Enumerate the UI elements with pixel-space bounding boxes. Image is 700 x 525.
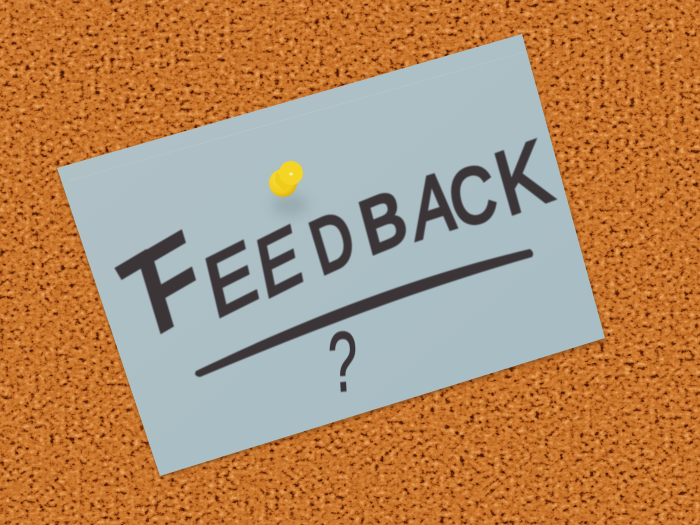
handwritten heading: FEEDBACK: C <box>442 148 503 245</box>
handwritten heading: FEEDBACK: A <box>408 152 459 258</box>
handwritten heading: FEEDBACK: E <box>198 223 265 337</box>
handwritten heading: FEEDBACK: K <box>485 120 560 235</box>
pin shadow <box>272 194 308 216</box>
paper shadow <box>57 36 606 478</box>
handwritten heading: FEEDBACK: E <box>250 207 308 316</box>
handwritten question mark: ? <box>326 314 360 410</box>
handwritten heading: FEEDBACK: B <box>352 173 415 270</box>
letter F with extended top bar: F <box>124 204 216 362</box>
handwritten heading: FEEDBACK <box>118 120 560 362</box>
blue paper note <box>57 34 605 476</box>
yellow push pin <box>269 161 303 197</box>
handwritten heading: FEEDBACK: D <box>302 195 363 291</box>
hand-drawn underline <box>195 249 533 377</box>
